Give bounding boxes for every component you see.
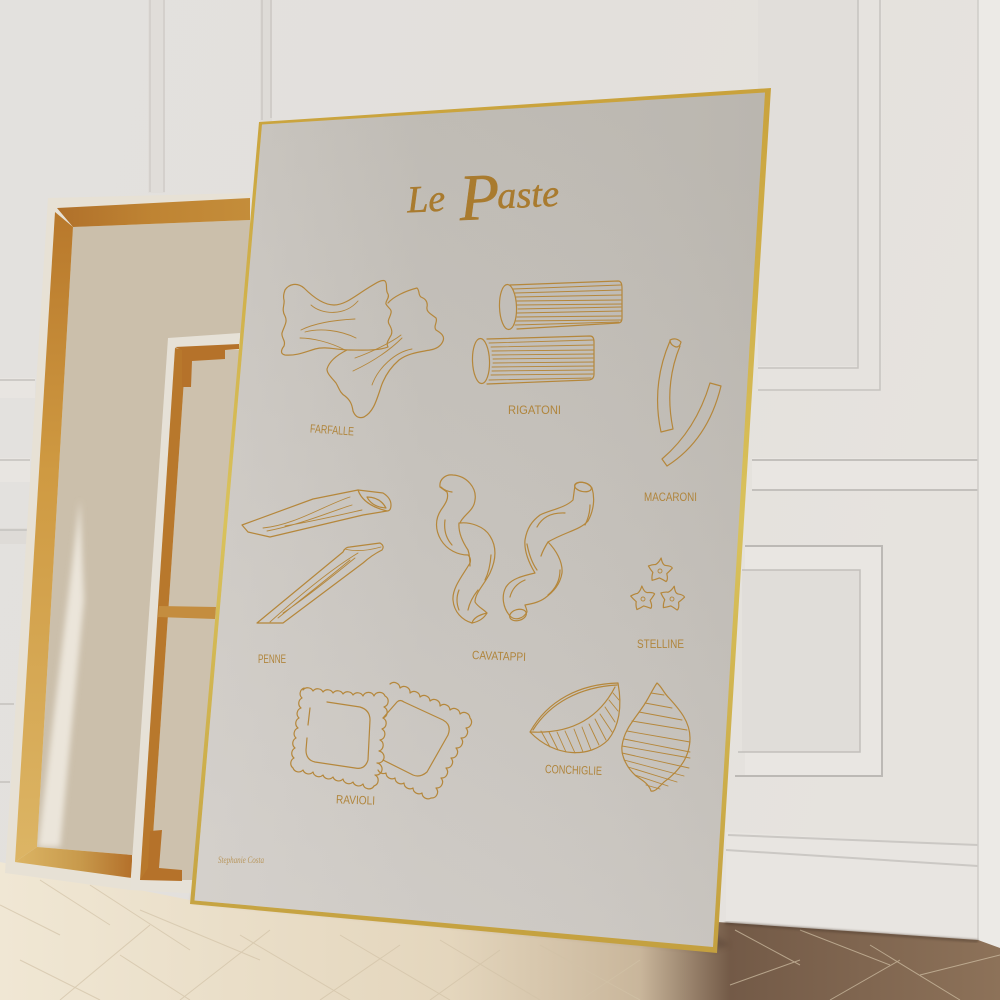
wooden floor [0, 862, 1000, 1000]
label: macaroni: MACARONI [644, 490, 697, 504]
wood stretcher: small corner [140, 830, 182, 881]
linen back: small [150, 350, 240, 880]
pasta: penne [242, 490, 391, 623]
label: penne: PENNE [258, 652, 286, 666]
title: Le [405, 177, 456, 221]
wood stretcher: small top [175, 344, 239, 387]
wood stretcher: small left [140, 348, 186, 880]
label: ravioli: RAVIOLI [336, 792, 375, 808]
pasta: rigatoni [472, 281, 622, 384]
poster shadow [192, 885, 730, 950]
pasta: stelline [630, 557, 686, 611]
pasta: ravioli [291, 682, 472, 799]
canvas edge: large [5, 193, 250, 890]
star right [658, 584, 686, 611]
wood stretcher: top [57, 198, 250, 227]
star top [647, 557, 673, 582]
large canvas, back side [5, 193, 250, 890]
label: farfalle: FARFALLE [310, 421, 354, 439]
canvas edge: small [130, 333, 240, 896]
wood stretcher: crossbar [158, 606, 216, 619]
title: aste [496, 173, 560, 217]
label: cavatappi: CAVATAPPI [472, 648, 526, 664]
label: conchiglie: CONCHIGLIE [545, 762, 602, 778]
poster paper [194, 92, 765, 947]
label: rigatoni: RIGATONI [508, 403, 561, 417]
pasta: cavatappi [436, 475, 594, 623]
artist signature: Stephanie Costa [218, 855, 264, 865]
wood stretcher: left [15, 212, 73, 862]
linen back: large [37, 220, 250, 860]
label: stelline: STELLINE [637, 637, 684, 651]
pasta: farfalle [282, 280, 444, 418]
light falling on linen [38, 500, 84, 847]
poster frame [190, 88, 771, 953]
wall mouldings: right side panels [726, 0, 1000, 948]
wall mouldings: top left panels [0, 0, 272, 782]
title [405, 158, 561, 237]
pasta: conchiglie [530, 683, 690, 791]
pasta: macaroni [658, 339, 721, 466]
star left [630, 585, 656, 610]
wood stretcher: bottom [15, 847, 132, 878]
title: P [457, 160, 501, 235]
small canvas, back side [130, 333, 240, 896]
